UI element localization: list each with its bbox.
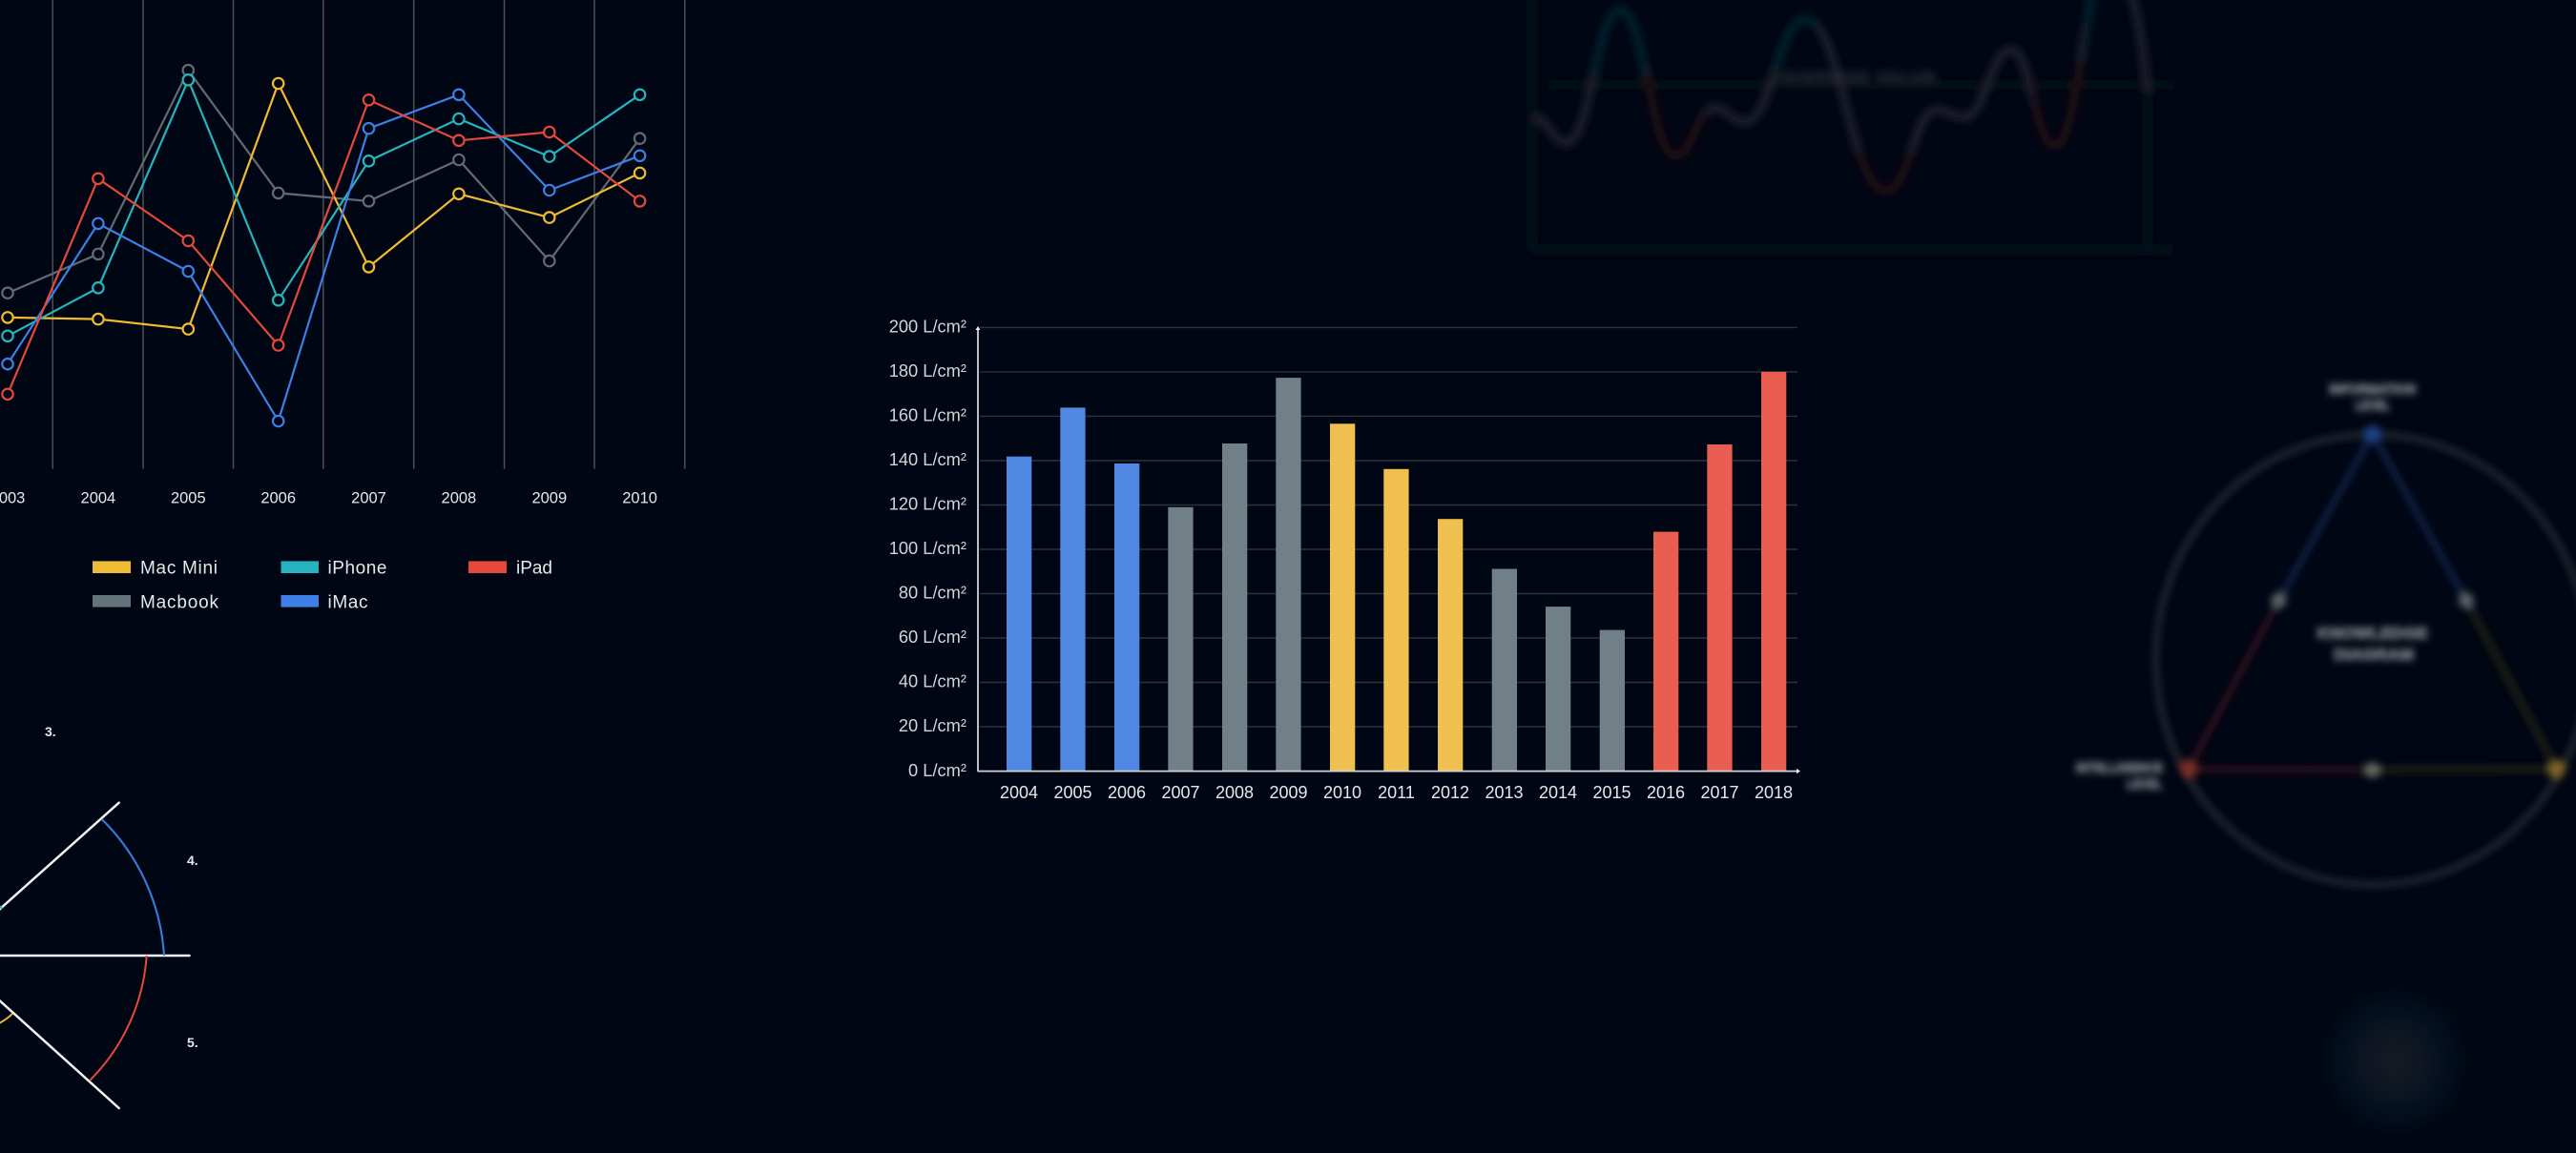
y axis labels: 0 L/cm²	[908, 760, 966, 780]
wave troughs in red	[1637, 62, 2088, 197]
legend item: iPhone	[280, 559, 387, 578]
series: Mac Mini	[2, 78, 645, 335]
bars: 2016-2018 red	[1653, 372, 1786, 772]
y axis labels: 80 L/cm²	[899, 583, 966, 603]
x axis year labels: 2006	[1108, 783, 1146, 802]
label 5: 5.	[187, 1035, 198, 1050]
legend item: iPad: iPad	[516, 559, 552, 578]
x axis year labels: 2005	[171, 490, 206, 507]
y axis labels: 120 L/cm²	[889, 494, 966, 514]
y axis labels	[889, 317, 966, 780]
x axis year labels: 2016	[1647, 783, 1685, 802]
left node label: LEVEL	[2127, 776, 2162, 793]
arc: blue	[102, 819, 164, 956]
y axis labels: 20 L/cm²	[899, 715, 966, 735]
bars: 2007-2009 gray	[1168, 378, 1301, 772]
axes with arrow tips	[975, 326, 1800, 773]
left node label: INTELLIGENCE	[2076, 760, 2163, 776]
threshold label: AVERAGE VALUE	[1779, 69, 1937, 84]
panel: bar chart	[889, 317, 1800, 802]
y axis labels: 200 L/cm²	[889, 317, 966, 337]
axes and threshold line	[1532, 0, 2177, 251]
series: Macbook	[2, 65, 645, 299]
bars: 2013-2015 gray	[1492, 568, 1625, 772]
panel: blurred wave chart	[1532, 0, 2177, 251]
top node label: INFORMATION	[2329, 381, 2416, 398]
x axis year labels	[0, 490, 657, 507]
legend	[93, 559, 552, 612]
y axis labels: 140 L/cm²	[889, 449, 966, 469]
series: iPad	[2, 94, 645, 400]
legend item: Mac Mini	[93, 559, 218, 578]
vertical grid lines	[52, 0, 685, 469]
legend item: iMac: iMac	[328, 593, 368, 612]
x axis year labels: 2015	[1592, 783, 1631, 802]
x axis year labels: 2012	[1431, 783, 1469, 802]
x axis year labels: 2009	[1269, 783, 1308, 802]
arc: red	[90, 956, 147, 1081]
arc: teal fragment	[0, 906, 2, 909]
x axis year labels: 2018	[1755, 783, 1793, 802]
y axis labels: 100 L/cm²	[889, 538, 966, 558]
x axis year labels: 2004	[81, 490, 115, 507]
y axis labels: 40 L/cm²	[899, 671, 966, 691]
series: iPhone	[2, 74, 645, 341]
legend item: iPad	[468, 559, 552, 578]
centre label: KNOWLEDGE	[2317, 624, 2428, 643]
y axis labels: 60 L/cm²	[899, 627, 966, 647]
panel: radial segment diagram	[0, 724, 198, 1108]
wave curve	[1534, 0, 2148, 191]
x axis year labels: 2013	[1485, 783, 1524, 802]
blurred glow spot	[2318, 985, 2471, 1138]
x axis year labels: 2005	[1053, 783, 1092, 802]
legend item: Macbook	[93, 593, 219, 612]
x axis year labels	[1000, 783, 1793, 802]
series: iMac	[2, 90, 645, 426]
x axis year labels: 2010	[622, 490, 657, 507]
x axis year labels: 2008	[1215, 783, 1254, 802]
wave peaks in teal	[1588, 0, 2098, 82]
x axis year labels: 2007	[351, 490, 386, 507]
x axis year labels: 2017	[1700, 783, 1739, 802]
left node label	[2076, 760, 2163, 793]
panel: blurred triangle in circle diagram	[2156, 425, 2576, 885]
y axis labels: 180 L/cm²	[889, 360, 966, 381]
x axis year labels: 2008	[442, 490, 476, 507]
x axis year labels: 2010	[1323, 783, 1361, 802]
y axis labels: 160 L/cm²	[889, 405, 966, 425]
bars: 2010-2012 yellow	[1330, 423, 1463, 772]
x axis year labels: 2007	[1161, 783, 1200, 802]
triangle edges	[2189, 434, 2557, 770]
panel: line chart	[0, 0, 685, 507]
centre label	[2317, 624, 2428, 664]
x axis year labels: 2014	[1539, 783, 1577, 802]
centre label: DIAGRAM	[2334, 646, 2414, 664]
horizontal grid lines	[980, 327, 1797, 727]
triangle nodes	[2364, 425, 2381, 443]
x axis year labels: 2004	[1000, 783, 1038, 802]
label 3: 3.	[45, 724, 56, 739]
x axis year labels: 2011	[1378, 783, 1415, 802]
arc: yellow	[0, 1014, 12, 1024]
outer ring	[2156, 435, 2576, 885]
x axis year labels: 2009	[531, 490, 567, 507]
spokes	[0, 803, 189, 1108]
x axis year labels: 2006	[260, 490, 296, 507]
blurred diagram labels	[2076, 381, 2428, 793]
top node label: LEVEL	[2356, 398, 2390, 414]
legend item: iMac	[280, 593, 368, 612]
legend item: iPhone: iPhone	[328, 559, 387, 578]
label 4: 4.	[187, 853, 198, 868]
bars: 2004-2006 blue	[1007, 407, 1139, 772]
top node label	[2329, 381, 2416, 414]
legend item: Mac Mini: Mac Mini	[140, 559, 218, 578]
legend item: Macbook: Macbook	[140, 593, 219, 612]
